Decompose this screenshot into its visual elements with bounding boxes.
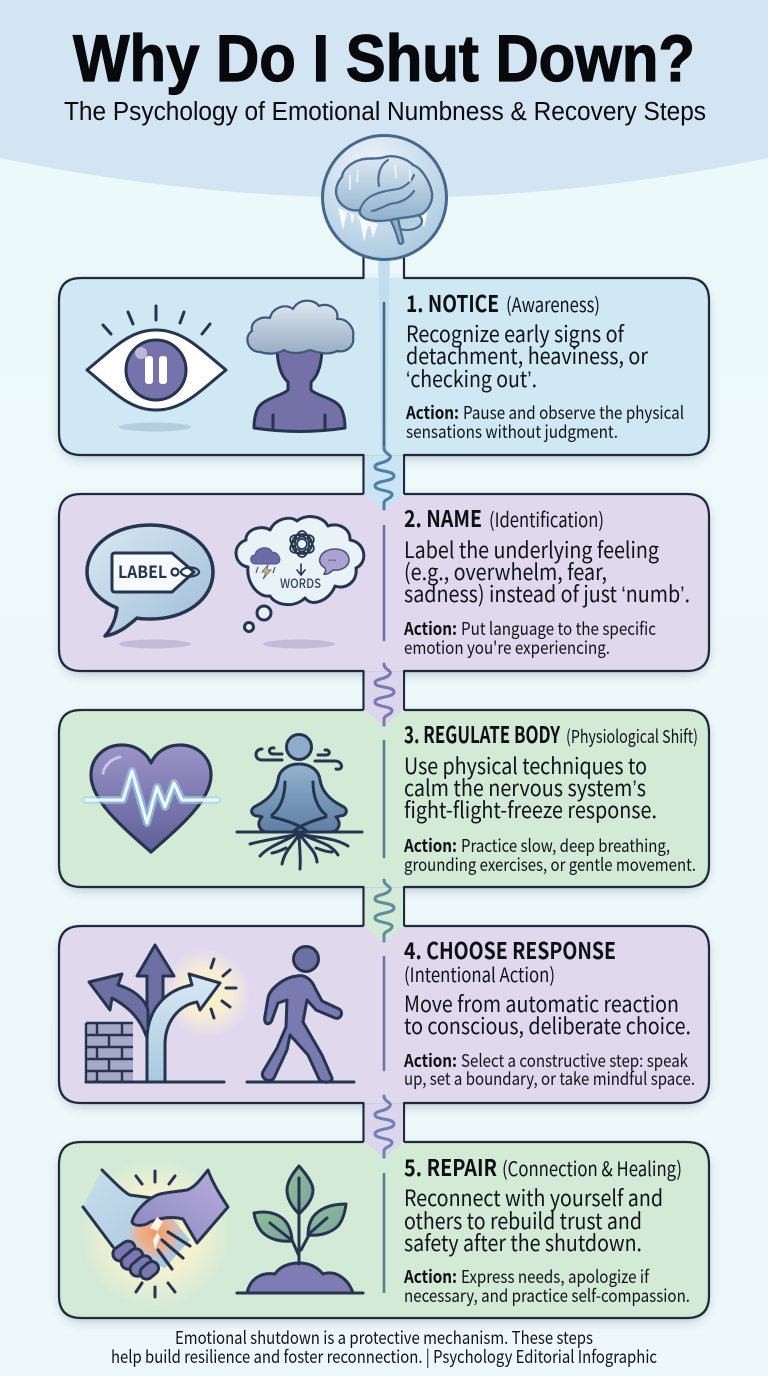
text: step 5: Action: [403,1264,457,1289]
text: step 4: Select a constructive step: speak [461,1048,688,1073]
text: step 4: Move from automatic reaction [404,987,679,1019]
text: step 5 [403,1149,690,1308]
panel: 5 repair [59,1142,709,1318]
text: step 5: 5. REPAIR [404,1149,497,1183]
icon: eye with pause [87,306,226,432]
divider line: step 5 [383,1174,385,1292]
text: step 4: Action: [403,1048,457,1073]
icon: branching arrows and wall [86,945,251,1082]
panel: 1 notice [59,255,709,494]
footer: Emotional shutdown is a protective mechanism. These steps [175,1325,593,1350]
icon: handshake [79,1157,231,1309]
text: step 2: Action: [403,616,457,641]
text: step 1: ‘checking out’. [406,362,537,394]
text: step 2: Label the underlying feeling [404,533,659,565]
icon: thought cloud with words: WORDS [280,573,321,592]
footer [111,1325,657,1369]
text: step 2: (e.g., overwhelm, fear, [404,555,607,587]
icon: thought cloud with words: ... [328,553,337,564]
text: step 2 [403,500,690,660]
text: step 3: grounding exercises, or gentle movement. [404,852,696,877]
panel: 2 name [59,494,709,710]
text: step 5: Reconnect with yourself and [404,1181,663,1213]
text: step 3: (Physiological Shift) [566,723,698,749]
text: step 1: Pause and observe the physical [463,400,684,425]
text: step 3: Action: [403,833,457,858]
panel: 3 regulate body [59,710,709,926]
icon: meditating figure with roots [237,734,362,869]
icon: sprout on mound [237,1166,363,1293]
text: step 3: Practice slow, deep breathing, [461,833,670,858]
text: step 1: detachment, heaviness, or [406,339,648,371]
connector: step 1 to 2 [365,303,403,510]
text: step 3: 3. REGULATE BODY [404,716,560,750]
text: step 5: others to rebuild trust and [404,1204,642,1236]
text: step 1: Action: [405,400,459,425]
text: step 5: necessary, and practice self-compassion. [404,1283,690,1308]
icon: thought cloud with words [236,517,364,648]
text: step 1: sensations without judgment. [406,419,618,444]
header band [0,0,768,198]
icon: heart with pulse [86,745,217,852]
text: step 1: (Awareness) [506,289,600,318]
text: step 5: Express needs, apologize if [461,1264,650,1289]
text: step 1 [405,285,684,444]
text: step 3: calm the nervous system’s [404,771,646,803]
text: step 1: 1. NOTICE [406,285,499,319]
icon: person under cloud [247,301,353,432]
brain orb [322,136,446,260]
text: step 1: Recognize early signs of [406,317,625,349]
icon: walking figure [247,946,354,1082]
text: step 5: (Connection & Healing) [502,1153,682,1182]
panel: 4 choose response [59,926,709,1142]
text: step 2: (Identification) [489,504,604,533]
text: step 4: to conscious, deliberate choice. [404,1009,691,1041]
subtitle: The Psychology of Emotional Numbness & Recovery Steps [64,98,706,126]
text: step 3: Use physical techniques to [404,749,647,781]
text: step 4 [403,932,695,1091]
text: step 4: up, set a boundary, or take mindful space. [404,1066,695,1091]
text: step 3: fight-flight-freeze response. [404,793,657,825]
text: step 3 [403,716,698,877]
text: step 2: Put language to the specific [461,616,656,641]
connector: step 2 to 3 [365,526,403,726]
title: Why Do I Shut Down? [73,21,695,95]
text: step 2: sadness) instead of just ‘numb’. [404,577,690,609]
connector: step 3 to 4 [365,741,403,942]
connector: step 4 to 5 [365,957,403,1158]
text: step 4: 4. CHOOSE RESPONSE [404,932,616,966]
text: step 4: (Intentional Action) [404,959,555,988]
icon: speech bubble with label tag: LABEL [118,558,167,583]
text: step 2: emotion you're experiencing. [404,635,610,660]
footer: help build resilience and foster reconnection. | Psychology Editorial Infographic [111,1344,657,1369]
text: step 5: safety after the shutdown. [404,1226,642,1258]
text: step 2: 2. NAME [404,500,482,534]
icon: speech bubble with label tag [87,525,213,648]
